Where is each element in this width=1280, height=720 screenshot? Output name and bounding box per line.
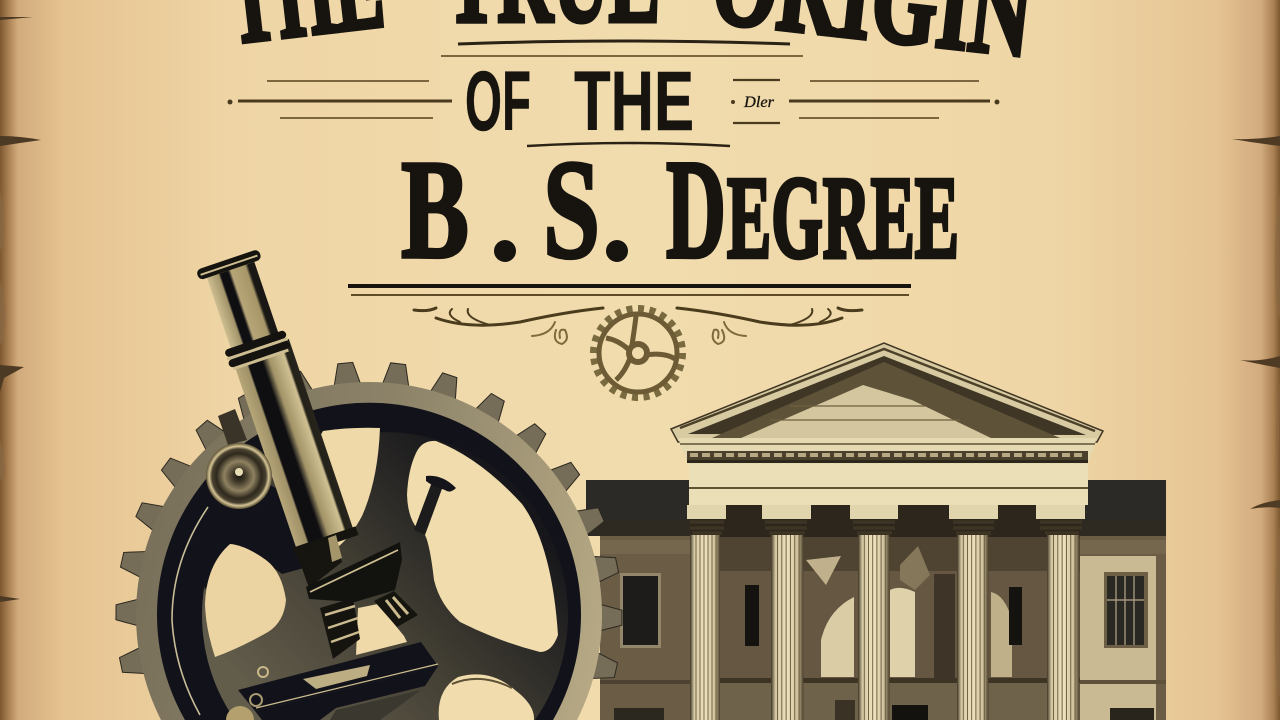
stage — [238, 642, 438, 711]
stage clip — [258, 667, 268, 677]
illustration: large gear — [116, 362, 622, 720]
ornamental rules around Of The — [228, 41, 1000, 146]
interior portico — [690, 505, 1080, 720]
arch lights — [821, 597, 854, 677]
word: small caps: EGREE — [727, 152, 959, 283]
spoke peg — [414, 482, 443, 535]
building wall — [600, 520, 1166, 720]
slit windows — [745, 585, 759, 646]
pediment — [671, 343, 1103, 442]
subtitle word: The: THE — [574, 54, 694, 148]
focus knob — [206, 443, 272, 509]
heading: B.S. Degree: B — [401, 130, 469, 288]
word: Degree: D — [666, 130, 726, 288]
nosepiece collar — [296, 534, 342, 588]
right window — [1104, 572, 1148, 648]
subtitle: Of The — [465, 54, 775, 148]
letter S: S — [543, 130, 600, 288]
light stone right wing — [1080, 556, 1156, 720]
entablature — [689, 464, 1088, 505]
lamp — [226, 706, 254, 720]
objective right — [374, 591, 418, 627]
subtitle: Of The: OF — [465, 54, 531, 148]
base — [255, 666, 438, 720]
dot after B — [494, 240, 516, 262]
gear window: upper left — [300, 428, 380, 547]
double rule under heading — [348, 284, 911, 296]
gear rim — [136, 382, 602, 720]
gear window: left — [205, 544, 286, 657]
side roof — [586, 480, 1166, 522]
dot after S — [606, 240, 628, 262]
illustration: microscope — [196, 248, 438, 720]
focus barrel behind — [218, 409, 247, 445]
gear dark band — [157, 403, 581, 720]
revolving plate — [306, 542, 402, 602]
gear teeth — [116, 362, 622, 683]
objective left — [320, 598, 360, 659]
dark arm above left window — [190, 470, 315, 590]
gear window: right — [407, 441, 558, 652]
icon: small gear — [594, 309, 682, 397]
gear hairline highlight — [172, 507, 208, 715]
eyepiece tube and body — [196, 248, 358, 557]
gear spoke disc — [202, 432, 568, 720]
flourish: right — [677, 308, 862, 344]
columns — [687, 505, 1085, 720]
title: The True Origin (cropped at top edge) — [219, 0, 1039, 84]
illustration: neoclassical building — [586, 343, 1166, 720]
lower windows — [614, 708, 664, 720]
small script mark: Dler — [743, 94, 775, 111]
gear window: under objectives — [356, 604, 407, 655]
left window — [620, 573, 661, 648]
flourish: left — [414, 308, 603, 344]
heading: B.S. Degree — [401, 130, 959, 288]
gear window: lower right — [439, 674, 534, 720]
